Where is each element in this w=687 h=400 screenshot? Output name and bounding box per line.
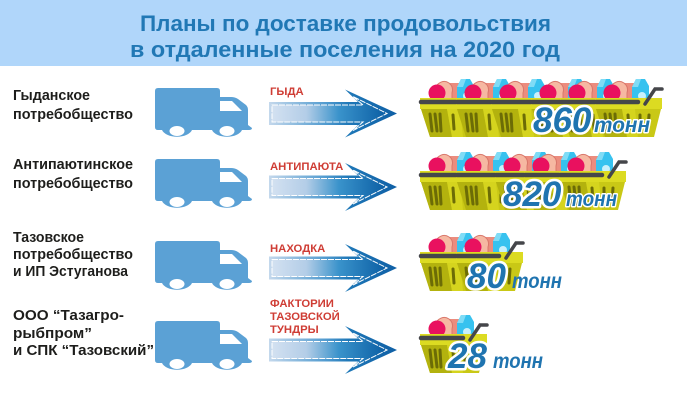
- icon: truck: [155, 321, 252, 370]
- value: 860 тонн: тонн: [594, 114, 650, 137]
- value: 80 тонн: 80: [467, 257, 506, 296]
- organisation name: ООО “Тазагро-: [13, 308, 124, 324]
- organisation name: и СПК “Тазовский”: [13, 343, 154, 359]
- organisation name: потребобщество: [13, 247, 133, 263]
- row 3: Находка: [13, 230, 562, 296]
- value: 860 тонн: [533, 101, 650, 140]
- title: [130, 11, 560, 62]
- value: 860 тонн: 860: [533, 101, 592, 140]
- organisation name: потребобщество: [13, 107, 133, 123]
- destination label: ТАЗОВСКОЙ: [270, 310, 340, 323]
- value: 28 тонн: 28: [447, 337, 487, 376]
- header band: [0, 0, 687, 66]
- value: 28 тонн: тонн: [493, 350, 543, 373]
- organisation name: потребобщество: [13, 176, 133, 192]
- value: 820 тонн: тонн: [566, 188, 617, 211]
- arrow: [269, 90, 397, 138]
- row 2: Антипаюта: [13, 152, 626, 214]
- value: 28 тонн: [447, 337, 543, 376]
- organisation name: Гыданское: [13, 88, 90, 104]
- organisation name: Тазовское: [13, 230, 84, 246]
- row 4: Фактории Тазовской тундры: [13, 298, 543, 376]
- destination label: ТУНДРЫ: [270, 324, 319, 336]
- food baskets: [420, 152, 626, 210]
- organisation name: [13, 308, 154, 359]
- arrow: [269, 163, 397, 211]
- icon: truck: [155, 88, 252, 137]
- food baskets: [420, 233, 523, 291]
- organisation name: рыбпром”: [13, 326, 92, 342]
- destination label: АНТИПАЮТА: [270, 161, 343, 173]
- organisation name: и ИП Эстуганова: [13, 264, 129, 280]
- row 1: Гыда: [13, 79, 662, 140]
- destination label: НАХОДКА: [270, 243, 325, 255]
- food baskets: [420, 79, 662, 137]
- organisation name: [13, 230, 133, 280]
- food basket: [420, 315, 487, 373]
- value: 80 тонн: [467, 257, 562, 296]
- value: 820 тонн: [503, 175, 617, 214]
- organisation name: Антипаютинское: [13, 157, 133, 173]
- arrow: [269, 244, 397, 292]
- value: 80 тонн: тонн: [512, 270, 562, 293]
- organisation name: [13, 157, 133, 192]
- icon: truck: [155, 241, 252, 290]
- value: 820 тонн: 820: [503, 175, 562, 214]
- arrow: [269, 326, 397, 374]
- icon: truck: [155, 159, 252, 208]
- organisation name: [13, 88, 133, 123]
- destination label: ФАКТОРИИ: [270, 298, 334, 310]
- title: в отдаленные поселения на 2020 год: [130, 37, 560, 62]
- destination label: ГЫДА: [270, 86, 304, 98]
- title: Планы по доставке продовольствия: [140, 11, 551, 36]
